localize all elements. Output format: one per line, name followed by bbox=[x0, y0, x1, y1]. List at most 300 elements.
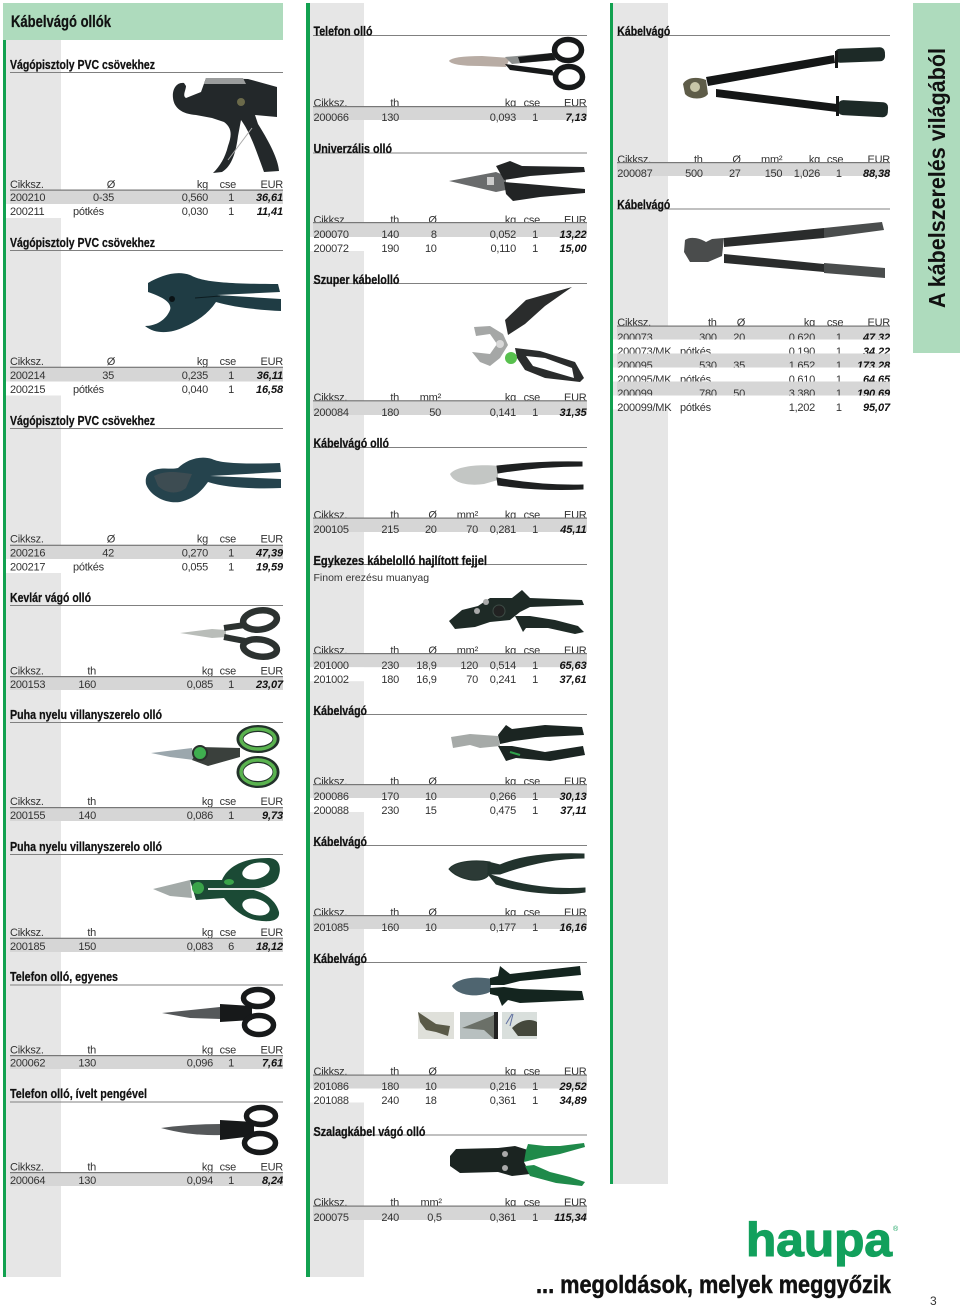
product: Szuper kábelolló: Cikksz. bbox=[314, 392, 347, 404]
product: Kábelvágó 201086: 1 bbox=[532, 1081, 538, 1093]
product: Egykezes kábelolló hajlított fejjel: 180 bbox=[381, 674, 399, 686]
right column background band bbox=[610, 3, 668, 1184]
product: Univerzális olló: kg bbox=[505, 214, 516, 226]
product: Kábelvágó 201086: cse bbox=[524, 1066, 540, 1078]
product: Telefon olló, egyenes: Telefon olló, egyenes bbox=[10, 969, 118, 984]
product: Vágópisztoly 200216: 47,39 bbox=[255, 548, 284, 560]
product: Egykezes kábelolló hajlított fejjel: Cikksz. bbox=[314, 645, 347, 657]
product: Telefon olló: 200066 bbox=[314, 112, 349, 124]
product: Egykezes kábelolló hajlított fejjel: 0,241 bbox=[490, 674, 516, 686]
icon: long-handled cable cutter bbox=[683, 47, 888, 117]
product: Szalagkábel vágó olló: mm² bbox=[421, 1197, 442, 1209]
product: Kábelvágó 201086: th bbox=[390, 1066, 399, 1078]
product: Egykezes kábelolló hajlított fejjel: EUR bbox=[564, 645, 587, 657]
product: Vágópisztoly 200214: 200214 bbox=[10, 370, 45, 382]
product: Puha nyelu villanyszerelo olló 200155 bbox=[10, 707, 283, 822]
product: Vágópisztoly 200214: 200215 bbox=[10, 384, 45, 396]
product: Kábelvágó olló: Ø bbox=[428, 510, 437, 522]
product: Kábelvágó 201085: 201085 bbox=[314, 922, 349, 934]
product: Kábelvágó 200086: 0,266 bbox=[490, 791, 516, 803]
product: Puha nyelu villanyszerelo olló 200185: 18,12 bbox=[256, 941, 283, 953]
product: Kábelvágó 201085: 10 bbox=[425, 922, 437, 934]
product: Kábelvágó 201086: 240 bbox=[381, 1095, 399, 1107]
product: Szuper kábelolló: EUR bbox=[564, 392, 587, 404]
product: Kábelvágó 200087: 1 bbox=[836, 168, 842, 180]
page number: 3 bbox=[930, 1294, 937, 1308]
product: Kevlár vágó olló: 160 bbox=[78, 679, 96, 691]
product: Kábelvágó 201086: Cikksz. bbox=[314, 1066, 347, 1078]
product: Telefon olló, ívelt pengével: Telefon olló, ívelt pengével bbox=[10, 1086, 147, 1101]
product: Kábelvágó 201085: Ø bbox=[428, 907, 437, 919]
product: Kevlár vágó olló bbox=[10, 590, 284, 691]
product: Kevlár vágó olló: 200153 bbox=[10, 679, 45, 691]
product: Univerzális olló: Ø bbox=[428, 214, 437, 226]
product: Egykezes kábelolló hajlított fejjel: 0,514 bbox=[490, 660, 516, 672]
product: Vágópisztoly 200214: 1 bbox=[228, 370, 234, 382]
product: Vágópisztoly 200216: 42 bbox=[102, 548, 114, 560]
product: Vágópisztoly 200210: 11,41 bbox=[257, 206, 283, 218]
product: Vágópisztoly 200216: EUR bbox=[261, 534, 283, 546]
icon: ratchet pipe shears bbox=[145, 273, 281, 332]
product: Kábelvágó 200073 family: 1 bbox=[836, 402, 842, 414]
product: Telefon olló, ívelt pengével: 8,24 bbox=[262, 1175, 283, 1187]
product: Kábelvágó olló: EUR bbox=[564, 510, 587, 522]
product: Kábelvágó 200073 family: 780 bbox=[699, 388, 717, 400]
product: Telefon olló, egyenes: 200062 bbox=[10, 1058, 45, 1070]
product: Univerzális olló: 8 bbox=[431, 229, 437, 241]
product: Telefon olló, ívelt pengével: 200064 bbox=[10, 1175, 45, 1187]
icon: cable cutter curved handles bbox=[449, 854, 585, 894]
product: Kábelvágó 200087: EUR bbox=[868, 154, 890, 166]
product: Telefon olló: Cikksz. bbox=[314, 98, 347, 110]
product: Vágópisztoly 200210: 36,61 bbox=[256, 192, 283, 204]
product: Kábelvágó 200073 family: pótkés bbox=[680, 346, 712, 358]
product: Telefon olló, ívelt pengével: 130 bbox=[78, 1175, 96, 1187]
product: Kábelvágó 200073 family: 0,610 bbox=[789, 374, 815, 386]
product: Szalagkábel vágó olló: th bbox=[390, 1197, 399, 1209]
product: Kábelvágó 200086: 10 bbox=[425, 791, 437, 803]
product: Telefon olló: kg bbox=[505, 98, 516, 110]
product: Telefon olló, egyenes: th bbox=[87, 1044, 96, 1056]
product: Szuper kábelolló: 200084 bbox=[314, 407, 349, 419]
product: Puha nyelu villanyszerelo olló 200185: th bbox=[87, 927, 96, 939]
product: Kábelvágó 200073 family: cse bbox=[827, 317, 843, 329]
product: Univerzális olló: 15,00 bbox=[559, 243, 587, 255]
product: Kábelvágó olló: 200105 bbox=[314, 524, 349, 536]
product: Kábelvágó 201086 bbox=[310, 951, 587, 1107]
product: Kábelvágó 200073 family: 1,652 bbox=[789, 360, 815, 372]
product: Kábelvágó 200073 family: EUR bbox=[868, 317, 890, 329]
icon: universal shears bbox=[449, 161, 585, 201]
product: Kábelvágó 200086: Cikksz. bbox=[314, 776, 347, 788]
product: Szalagkábel vágó olló: 1 bbox=[532, 1212, 538, 1224]
product: Vágópisztoly 200214: 0,235 bbox=[182, 370, 208, 382]
product: Kábelvágó 200086: 200088 bbox=[314, 805, 349, 817]
product: Kábelvágó 200087: kg bbox=[809, 154, 820, 166]
product: Vágópisztoly 200216: 200217 bbox=[10, 562, 45, 574]
product: Puha nyelu villanyszerelo olló 200155: 200155 bbox=[10, 810, 45, 822]
product: Telefon olló, ívelt pengével: kg bbox=[202, 1162, 213, 1174]
product: Puha nyelu villanyszerelo olló 200155: Puha nyelu villanyszerelo olló bbox=[10, 707, 162, 722]
product: Szalagkábel vágó olló: 0,361 bbox=[490, 1212, 516, 1224]
product: Vágópisztoly 200210: 1 bbox=[228, 192, 234, 204]
product: Kábelvágó 200073 family: 50 bbox=[733, 388, 745, 400]
side tab: section title bbox=[913, 3, 960, 353]
product: Kábelvágó 200073 family: 200073 bbox=[617, 332, 653, 344]
product: Kábelvágó 201086: Ø bbox=[428, 1066, 437, 1078]
product: Kábelvágó 201086: 201086 bbox=[314, 1081, 349, 1093]
product: Vágópisztoly 200216: 0,270 bbox=[182, 548, 208, 560]
product: Puha nyelu villanyszerelo olló 200185: 6 bbox=[228, 941, 234, 953]
product: Vágópisztoly 200210: pótkés bbox=[73, 206, 105, 218]
product: Kábelvágó 200086: 0,475 bbox=[490, 805, 516, 817]
icon: ribbon cable cutter bbox=[450, 1143, 585, 1186]
product: Vágópisztoly 200210 bbox=[6, 57, 283, 218]
product: Vágópisztoly 200210: 0,030 bbox=[182, 206, 208, 218]
product: Puha nyelu villanyszerelo olló 200155: Cikksz. bbox=[10, 796, 44, 808]
product: Egykezes kábelolló hajlított fejjel: 230 bbox=[381, 660, 399, 672]
product: Egykezes kábelolló hajlított fejjel: 120 bbox=[460, 660, 478, 672]
product: Kábelvágó 200086: 170 bbox=[381, 791, 399, 803]
product: Kábelvágó 200087: 500 bbox=[685, 168, 703, 180]
product: Kevlár vágó olló: Cikksz. bbox=[10, 666, 44, 678]
product: Szuper kábelolló: 1 bbox=[532, 407, 538, 419]
product: Telefon olló, egyenes: 1 bbox=[228, 1058, 234, 1070]
product: Kábelvágó 200073 family: 0,190 bbox=[789, 346, 815, 358]
subtitle: Finom erezésu muanyag bbox=[314, 572, 429, 584]
product: Kábelvágó 200073 family: 20 bbox=[733, 332, 745, 344]
icon: one-hand cable shears bbox=[449, 590, 584, 634]
product: Kábelvágó 201086: 10 bbox=[425, 1081, 437, 1093]
product: Kábelvágó 201086: 0,361 bbox=[490, 1095, 516, 1107]
product: Egykezes kábelolló hajlított fejjel: 201002 bbox=[314, 674, 349, 686]
product: Univerzális olló bbox=[310, 141, 587, 255]
product: Kevlár vágó olló: 0,085 bbox=[187, 679, 213, 691]
product: Telefon olló, egyenes: cse bbox=[220, 1044, 236, 1056]
product: Kábelvágó 200073 family: 47,32 bbox=[862, 332, 890, 344]
product: Kábelvágó 200087: Cikksz. bbox=[617, 154, 651, 166]
product: Kábelvágó 200073 family: 530 bbox=[699, 360, 717, 372]
product: Vágópisztoly 200216: 0,055 bbox=[182, 562, 208, 574]
product: Telefon olló, egyenes: 0,096 bbox=[187, 1058, 213, 1070]
product: Vágópisztoly 200210: 200211 bbox=[10, 206, 45, 218]
product: Egykezes kábelolló hajlított fejjel: 70 bbox=[466, 674, 478, 686]
product: Vágópisztoly 200216: 200216 bbox=[10, 548, 45, 560]
product: Telefon olló: th bbox=[390, 98, 399, 110]
product: Kábelvágó 200086 bbox=[310, 703, 587, 817]
product: Kábelvágó 200073 family: 1 bbox=[836, 388, 842, 400]
product: Puha nyelu villanyszerelo olló 200155: kg bbox=[202, 796, 213, 808]
product: Vágópisztoly 200214: 0,040 bbox=[182, 384, 208, 396]
product: Kábelvágó 200073 family: 95,07 bbox=[863, 402, 891, 414]
product: Vágópisztoly 200216: Ø bbox=[107, 534, 116, 546]
product: Kábelvágó 200086: 37,11 bbox=[560, 805, 586, 817]
product: Kábelvágó olló: kg bbox=[505, 510, 516, 522]
product: Telefon olló: 0,093 bbox=[490, 112, 516, 124]
product: Vágópisztoly 200216: kg bbox=[197, 534, 208, 546]
product: Kábelvágó 200073 family: 200095 bbox=[617, 360, 653, 372]
product: Puha nyelu villanyszerelo olló 200155: 1 bbox=[228, 810, 234, 822]
product: Puha nyelu villanyszerelo olló 200185: 0,083 bbox=[187, 941, 213, 953]
product: Telefon olló: 130 bbox=[381, 112, 399, 124]
product: Kevlár vágó olló: 23,07 bbox=[255, 679, 284, 691]
product: Kábelvágó 201086: 29,52 bbox=[558, 1081, 586, 1093]
product: Kábelvágó 201086: 201088 bbox=[314, 1095, 349, 1107]
icon: cable cutting pliers bbox=[450, 462, 583, 490]
icon: green soft-handled scissors bbox=[151, 728, 276, 784]
icon: telephone scissors curved bbox=[161, 1108, 276, 1152]
product: Kábelvágó 200073 family bbox=[613, 197, 891, 414]
title banner bbox=[3, 3, 283, 40]
product: Puha nyelu villanyszerelo olló 200155: 140 bbox=[78, 810, 96, 822]
product: Kábelvágó 200073 family: 64,65 bbox=[863, 374, 891, 386]
product: Telefon olló, egyenes: Cikksz. bbox=[10, 1044, 44, 1056]
product: Telefon olló, ívelt pengével bbox=[10, 1086, 283, 1187]
product: Kábelvágó 200073 family: 190,69 bbox=[857, 388, 891, 400]
product: Vágópisztoly 200214 bbox=[6, 235, 284, 396]
product: Puha nyelu villanyszerelo olló 200155: cse bbox=[220, 796, 236, 808]
product: Kábelvágó 200073 family: Ø bbox=[737, 317, 746, 329]
product: Vágópisztoly 200210: cse bbox=[220, 179, 236, 191]
product: Kábelvágó 200073 family: pótkés bbox=[680, 374, 712, 386]
title banner: Kábelvágó ollók bbox=[11, 12, 111, 31]
product: Egykezes kábelolló hajlított fejjel: kg bbox=[505, 645, 516, 657]
product: Vágópisztoly 200216: pótkés bbox=[73, 562, 105, 574]
product: Egykezes kábelolló hajlított fejjel: 18,9 bbox=[416, 660, 437, 672]
product: Kevlár vágó olló: cse bbox=[220, 666, 236, 678]
product: Kábelvágó olló: 0,281 bbox=[490, 524, 516, 536]
product: Szuper kábelolló: 180 bbox=[381, 407, 399, 419]
product: Kábelvágó 200073 family: 200099 bbox=[617, 388, 653, 400]
icon: long-handled cable cutter, grey grips bbox=[684, 222, 885, 278]
product: Szuper kábelolló: th bbox=[390, 392, 399, 404]
product: Kábelvágó 200073 family: 173,28 bbox=[857, 360, 891, 372]
product: Univerzális olló: cse bbox=[524, 214, 540, 226]
product: Kábelvágó olló: 70 bbox=[466, 524, 478, 536]
product: Univerzális olló: 13,22 bbox=[559, 229, 586, 241]
product: Telefon olló, ívelt pengével: EUR bbox=[261, 1162, 283, 1174]
product: Puha nyelu villanyszerelo olló 200185: EUR bbox=[261, 927, 283, 939]
product: Telefon olló, ívelt pengével: th bbox=[87, 1162, 96, 1174]
product: Egykezes kábelolló hajlított fejjel: cse bbox=[524, 645, 540, 657]
product: Kábelvágó 200073 family: 3,380 bbox=[789, 388, 815, 400]
product: Kábelvágó olló: th bbox=[390, 510, 399, 522]
product: Szalagkábel vágó olló: kg bbox=[505, 1197, 516, 1209]
product: Vágópisztoly 200210: Vágópisztoly PVC csövekhez bbox=[10, 57, 155, 72]
product: Vágópisztoly 200214: EUR bbox=[261, 356, 283, 368]
product: Szuper kábelolló bbox=[313, 272, 587, 419]
product: Kevlár vágó olló: EUR bbox=[261, 666, 283, 678]
product: Kábelvágó 200087: th bbox=[694, 154, 703, 166]
product: Kábelvágó 200087: cse bbox=[827, 154, 843, 166]
product: Puha nyelu villanyszerelo olló 200185: Puha nyelu villanyszerelo olló bbox=[10, 839, 162, 854]
product: Kábelvágó 200086: 230 bbox=[381, 805, 399, 817]
product: Kábelvágó 201086: EUR bbox=[564, 1066, 587, 1078]
product: Szuper kábelolló: 0,141 bbox=[490, 407, 516, 419]
product: Egykezes kábelolló hajlított fejjel: 1 bbox=[532, 674, 538, 686]
product: Vágópisztoly 200216: 1 bbox=[228, 548, 234, 560]
product: Egykezes kábelolló hajlított fejjel: th bbox=[390, 645, 399, 657]
product: Telefon olló, ívelt pengével: 1 bbox=[228, 1175, 234, 1187]
product: Kábelvágó 200073 family: 0,620 bbox=[789, 332, 815, 344]
product: Kábelvágó 201085: kg bbox=[505, 907, 516, 919]
icon: cable cutter with blue head bbox=[452, 966, 584, 1006]
product: Univerzális olló: 200072 bbox=[314, 243, 349, 255]
product: Univerzális olló: Cikksz. bbox=[314, 214, 347, 226]
product: Kábelvágó 201085: th bbox=[390, 907, 399, 919]
product: Kábelvágó olló: cse bbox=[524, 510, 540, 522]
product: Puha nyelu villanyszerelo olló 200185: 200185 bbox=[10, 941, 45, 953]
product: Puha nyelu villanyszerelo olló 200185: 150 bbox=[78, 941, 96, 953]
product: Kábelvágó olló: mm² bbox=[457, 510, 479, 522]
product: Kábelvágó 200073 family: 1 bbox=[836, 374, 842, 386]
product: Telefon olló, ívelt pengével: cse bbox=[220, 1162, 236, 1174]
product: Egykezes kábelolló hajlított fejjel: 16,9 bbox=[416, 674, 437, 686]
product: Telefon olló bbox=[313, 24, 587, 124]
product: Kevlár vágó olló: kg bbox=[202, 666, 213, 678]
product: Kábelvágó 200073 family: pótkés bbox=[680, 402, 712, 414]
product: Kábelvágó 200073 family: 200095/MK bbox=[617, 374, 672, 386]
product: Kábelvágó olló: Cikksz. bbox=[314, 510, 347, 522]
product: Univerzális olló: 1 bbox=[532, 229, 538, 241]
product: Kábelvágó 200086: th bbox=[390, 776, 399, 788]
product: Vágópisztoly 200210: kg bbox=[197, 179, 208, 191]
product: Vágópisztoly 200216: 19,59 bbox=[256, 562, 284, 574]
product: Vágópisztoly 200210: 200210 bbox=[10, 192, 45, 204]
side tab: section title: A kábelszerelés világából bbox=[924, 48, 950, 308]
product: Telefon olló, egyenes: 130 bbox=[78, 1058, 96, 1070]
product: Univerzális olló: EUR bbox=[564, 214, 587, 226]
product: Puha nyelu villanyszerelo olló 200185: cse bbox=[220, 927, 236, 939]
product: Univerzális olló: 0,052 bbox=[490, 229, 516, 241]
product: Kábelvágó 201086: 1 bbox=[532, 1095, 538, 1107]
product: Kábelvágó 200087: 27 bbox=[729, 168, 741, 180]
product: Vágópisztoly 200214: Cikksz. bbox=[10, 356, 44, 368]
product: Kábelvágó 200073 family: 35 bbox=[733, 360, 745, 372]
icon: dark green scissors bbox=[153, 858, 280, 921]
product: Univerzális olló: th bbox=[390, 214, 399, 226]
product: Kevlár vágó olló: Kevlár vágó olló bbox=[10, 590, 91, 605]
product: Telefon olló, egyenes: EUR bbox=[261, 1044, 283, 1056]
product: Kábelvágó 200073 family: 200099/MK bbox=[617, 402, 672, 414]
product: Kábelvágó 201086: Kábelvágó bbox=[314, 951, 367, 966]
product: Telefon olló: EUR bbox=[564, 98, 587, 110]
product: Vágópisztoly 200214: Ø bbox=[107, 356, 116, 368]
product: Vágópisztoly 200216: cse bbox=[220, 534, 236, 546]
product: Kábelvágó 200086: 15 bbox=[425, 805, 437, 817]
product: Kevlár vágó olló: th bbox=[87, 666, 96, 678]
product: Telefon olló: 7,13 bbox=[565, 112, 586, 124]
product: Vágópisztoly 200216 bbox=[6, 413, 284, 574]
product: Telefon olló, egyenes: kg bbox=[202, 1044, 213, 1056]
product: Szuper kábelolló: cse bbox=[524, 392, 540, 404]
product: Puha nyelu villanyszerelo olló 200155: EUR bbox=[261, 796, 283, 808]
product: Szalagkábel vágó olló: cse bbox=[524, 1197, 540, 1209]
product: Kábelvágó 200073 family: kg bbox=[804, 317, 815, 329]
product: Kábelvágó 200087: 200087 bbox=[617, 168, 653, 180]
product: Kábelvágó 200073 family: 1 bbox=[836, 332, 842, 344]
product: Vágópisztoly 200216: 1 bbox=[228, 562, 234, 574]
product: Kábelvágó 200086: Ø bbox=[428, 776, 437, 788]
product: Puha nyelu villanyszerelo olló 200185: kg bbox=[202, 927, 213, 939]
product: Kábelvágó 200073 family: 1 bbox=[836, 360, 842, 372]
product: Egykezes kábelolló hajlított fejjel: Ø bbox=[428, 645, 437, 657]
product: Kábelvágó 201085: 160 bbox=[381, 922, 399, 934]
product: Vágópisztoly 200210: Cikksz. bbox=[10, 179, 44, 191]
product: Szuper kábelolló: 50 bbox=[429, 407, 441, 419]
icon: pistol pipe cutter bbox=[173, 78, 279, 173]
product: Kábelvágó 200087: 150 bbox=[765, 168, 782, 180]
product: Telefon olló, ívelt pengével: 0,094 bbox=[187, 1175, 213, 1187]
product: Telefon olló: 1 bbox=[532, 112, 538, 124]
product: Univerzális olló: 0,110 bbox=[491, 243, 516, 255]
product: Kábelvágó 200073 family: 300 bbox=[699, 332, 717, 344]
product: Szalagkábel vágó olló: Cikksz. bbox=[314, 1197, 347, 1209]
product: Szalagkábel vágó olló: 115,34 bbox=[554, 1212, 586, 1224]
product: Kábelvágó olló bbox=[313, 436, 587, 536]
product: Telefon olló, egyenes bbox=[10, 969, 283, 1070]
product: Kábelvágó 201085: Kábelvágó bbox=[314, 834, 367, 849]
product: Szalagkábel vágó olló bbox=[313, 1124, 587, 1224]
product: Kábelvágó 200086: kg bbox=[505, 776, 516, 788]
product: Telefon olló: cse bbox=[524, 98, 540, 110]
middle column background band bbox=[306, 3, 364, 1277]
product: Vágópisztoly 200214: pótkés bbox=[73, 384, 105, 396]
icon: cable cutter green-black grip bbox=[451, 725, 585, 761]
product: Univerzális olló: Univerzális olló bbox=[314, 141, 392, 156]
product: Szuper kábelolló: kg bbox=[505, 392, 516, 404]
product: Kábelvágó olló: 45,11 bbox=[559, 524, 586, 536]
product: Kábelvágó olló: 1 bbox=[532, 524, 538, 536]
product: Kábelvágó 200086: EUR bbox=[564, 776, 587, 788]
product: Vágópisztoly 200210: 0-35 bbox=[93, 192, 114, 204]
product: Kábelvágó 200086: 200086 bbox=[314, 791, 349, 803]
product: Kábelvágó 201085: 16,16 bbox=[559, 922, 587, 934]
product: Vágópisztoly 200210: EUR bbox=[261, 179, 283, 191]
logo: haupa: haupa bbox=[746, 1213, 893, 1266]
product: Vágópisztoly 200214: 1 bbox=[228, 384, 234, 396]
product: Egykezes kábelolló hajlított fejjel bbox=[310, 553, 587, 686]
product: Szalagkábel vágó olló: EUR bbox=[564, 1197, 587, 1209]
product: Kábelvágó 201085 bbox=[313, 834, 587, 934]
product: Egykezes kábelolló hajlított fejjel: 37,61 bbox=[559, 674, 586, 686]
product: Vágópisztoly 200216: Cikksz. bbox=[10, 534, 44, 546]
product: Kábelvágó 200073 family: 1 bbox=[836, 346, 842, 358]
product: Vágópisztoly 200210: 1 bbox=[228, 206, 234, 218]
product: Univerzális olló: 200070 bbox=[314, 229, 349, 241]
product: Egykezes kábelolló hajlított fejjel: 201000 bbox=[314, 660, 349, 672]
product: Kábelvágó 200087: Ø bbox=[732, 154, 741, 166]
product: Kábelvágó 200087: Kábelvágó bbox=[617, 24, 670, 38]
product: Szuper kábelolló: 31,35 bbox=[559, 407, 587, 419]
product: Kábelvágó 201086: kg bbox=[505, 1066, 516, 1078]
product: Vágópisztoly 200214: 35 bbox=[102, 370, 114, 382]
product: Szalagkábel vágó olló: Szalagkábel vágó olló bbox=[314, 1124, 426, 1139]
product: Kábelvágó 200086: 30,13 bbox=[559, 791, 586, 803]
product: Egykezes kábelolló hajlított fejjel: mm² bbox=[457, 645, 479, 657]
product: Kábelvágó 201086: 180 bbox=[381, 1081, 399, 1093]
product: Vágópisztoly 200214: kg bbox=[197, 356, 208, 368]
product: Kábelvágó 200087: mm² bbox=[761, 154, 783, 166]
product: Szalagkábel vágó olló: 240 bbox=[381, 1212, 399, 1224]
product: Kábelvágó olló: 215 bbox=[381, 524, 399, 536]
product: Egykezes kábelolló hajlított fejjel: Egykezes kábelolló hajlított fejjel bbox=[314, 553, 487, 568]
product: Kábelvágó 200073 family: 200073/MK bbox=[617, 346, 672, 358]
product: Kábelvágó 200086: 1 bbox=[532, 791, 538, 803]
product: Szalagkábel vágó olló: 200075 bbox=[314, 1212, 349, 1224]
product: Univerzális olló: 1 bbox=[532, 243, 538, 255]
product: Vágópisztoly 200214: 16,58 bbox=[256, 384, 284, 396]
